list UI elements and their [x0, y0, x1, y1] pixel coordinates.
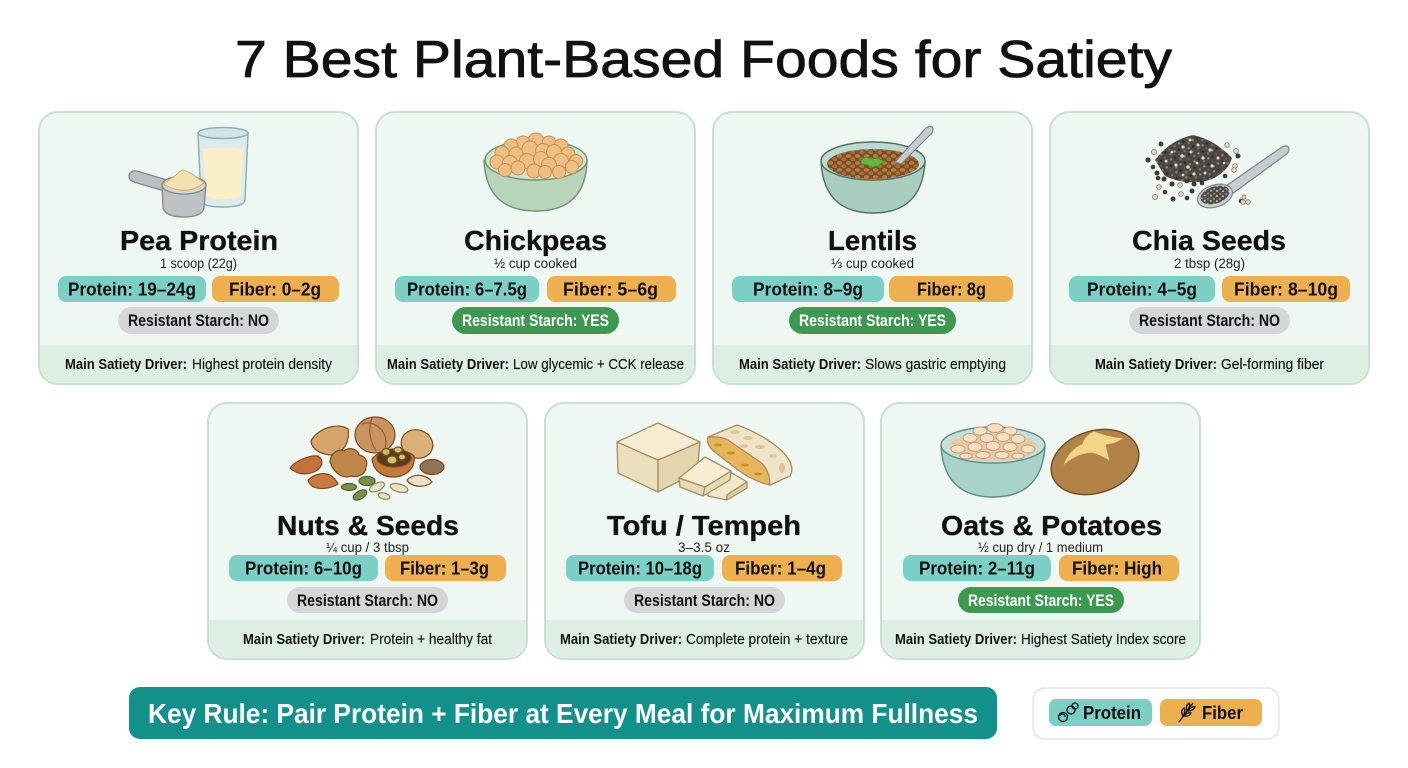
resistant starch pill: Resistant Starch: YES: [968, 592, 1114, 610]
protein pill: [229, 555, 378, 581]
protein pill: [395, 276, 539, 302]
card background: [881, 403, 1200, 659]
satiety driver: Low glycemic + CCK release: [513, 356, 684, 373]
driver band: [714, 345, 1031, 383]
resistant starch pill: Resistant Starch: NO: [634, 592, 775, 610]
resistant starch pill: [118, 307, 279, 334]
heading: Nuts & Seeds: [277, 510, 459, 541]
protein pill: [58, 276, 206, 302]
protein pill: Protein: 10–18g: [578, 558, 702, 578]
satiety driver: [1095, 356, 1324, 373]
legend: fiber: [1160, 699, 1262, 726]
heading: Tofu / Tempeh: [607, 510, 801, 541]
panel: lentils: [713, 112, 1032, 384]
fiber pill: [889, 276, 1013, 302]
satiety driver: [65, 356, 332, 373]
driver band: [377, 345, 694, 383]
heading: Oats & Potatoes: [941, 510, 1162, 541]
panel: nuts and seeds: [208, 403, 527, 659]
protein pill: [903, 555, 1051, 581]
legend: protein: [1049, 699, 1152, 726]
fiber pill: [385, 555, 506, 581]
protein pill: Protein: 2–11g: [919, 558, 1035, 578]
card background: [39, 112, 358, 384]
satiety driver: Main Satiety Driver:: [739, 356, 861, 373]
satiety driver: Highest Satiety Index score: [1021, 631, 1186, 648]
icon: oats bowl and baked potato: [941, 419, 1147, 505]
icon: scoop and glass of pea protein: [129, 128, 248, 217]
resistant starch pill: [789, 307, 956, 334]
satiety driver: Gel-forming fiber: [1221, 356, 1324, 373]
icon: wheat: [1179, 703, 1195, 722]
protein pill: Protein: 6–7.5g: [407, 280, 527, 300]
serving size: 3–3.5 oz: [678, 540, 730, 555]
icon: assorted nuts and seeds: [290, 417, 444, 502]
satiety driver: [895, 631, 1186, 648]
resistant starch pill: [958, 587, 1124, 613]
icon: tofu block and tempeh: [617, 423, 792, 500]
driver band: [546, 620, 863, 658]
fiber pill: Fiber: 8g: [917, 280, 986, 300]
driver band: [1051, 345, 1368, 383]
resistant starch pill: Resistant Starch: YES: [799, 312, 946, 330]
title: 7 Best Plant-Based Foods for Satiety: [235, 31, 1172, 89]
resistant starch pill: [624, 587, 785, 613]
icon: chia seed pile and spoon: [1145, 135, 1289, 212]
fiber pill: [212, 276, 339, 302]
fiber pill: Fiber: 1–3g: [400, 558, 489, 578]
heading: Chia Seeds: [1132, 225, 1286, 256]
protein pill: [732, 276, 884, 302]
fiber pill: Fiber: 8–10g: [1234, 280, 1338, 300]
legend: protein: Protein: [1083, 703, 1141, 723]
satiety driver: Main Satiety Driver:: [387, 356, 509, 373]
serving size: ⅓ cup cooked: [831, 256, 914, 271]
satiety driver: Highest protein density: [192, 356, 332, 373]
protein pill: Protein: 19–24g: [68, 280, 196, 300]
protein pill: [566, 555, 714, 581]
card background: [376, 112, 695, 384]
satiety driver: Slows gastric emptying: [865, 356, 1006, 373]
serving size: ¼ cup / 3 tbsp: [326, 540, 409, 555]
fiber pill: [1059, 555, 1179, 581]
driver band: [882, 620, 1199, 658]
legend: [1033, 688, 1279, 739]
satiety driver: Main Satiety Driver:: [65, 356, 187, 373]
driver band: [209, 620, 526, 658]
icon: bowl of lentils with spoon: [821, 126, 933, 213]
satiety driver: Protein + healthy fat: [370, 631, 493, 648]
protein pill: Protein: 6–10g: [245, 558, 362, 578]
resistant starch pill: [1129, 307, 1290, 334]
heading: Pea Protein: [120, 225, 278, 256]
serving size: 2 tbsp (28g): [1174, 256, 1245, 271]
icon: bowl of chickpeas: [484, 133, 587, 211]
protein pill: [1069, 276, 1215, 302]
resistant starch pill: Resistant Starch: NO: [128, 312, 269, 330]
fiber pill: [1222, 276, 1350, 302]
card background: [1050, 112, 1369, 384]
fiber pill: [547, 276, 676, 302]
satiety driver: Main Satiety Driver:: [560, 631, 682, 648]
fiber pill: [722, 555, 842, 581]
heading: Chickpeas: [464, 225, 607, 256]
legend: fiber: Fiber: [1202, 703, 1243, 723]
fiber pill: Fiber: 0–2g: [229, 280, 321, 300]
satiety driver: [243, 631, 493, 648]
panel: tofu and tempeh: [545, 403, 864, 659]
serving size: ½ cup dry / 1 medium: [978, 540, 1103, 555]
fiber pill: Fiber: High: [1072, 558, 1162, 578]
key rule banner: Key Rule: Pair Protein + Fiber at Every Meal for Maximum Fullness: [148, 698, 978, 729]
protein pill: Protein: 4–5g: [1087, 280, 1197, 300]
serving size: 1 scoop (22g): [160, 256, 237, 271]
driver band: [40, 345, 357, 383]
protein pill: Protein: 8–9g: [753, 280, 863, 300]
resistant starch pill: Resistant Starch: NO: [1139, 312, 1280, 330]
resistant starch pill: Resistant Starch: YES: [462, 312, 609, 330]
satiety driver: [387, 356, 684, 373]
fiber pill: Fiber: 1–4g: [735, 558, 826, 578]
icon: protein chain: [1058, 703, 1078, 722]
satiety driver: Main Satiety Driver:: [1095, 356, 1217, 373]
fiber pill: Fiber: 5–6g: [563, 280, 658, 300]
satiety driver: Complete protein + texture: [686, 631, 848, 648]
satiety driver: Main Satiety Driver:: [895, 631, 1017, 648]
card background: [713, 112, 1032, 384]
card background: [545, 403, 864, 659]
key rule banner: [129, 687, 997, 739]
panel: oats and potatoes: [881, 403, 1200, 659]
panel: chia seeds: [1050, 112, 1369, 384]
resistant starch pill: [452, 307, 619, 334]
serving size: ½ cup cooked: [494, 256, 577, 271]
panel: chickpeas: [376, 112, 695, 384]
resistant starch pill: [287, 587, 448, 613]
satiety driver: [560, 631, 848, 648]
satiety driver: Main Satiety Driver:: [243, 631, 365, 648]
resistant starch pill: Resistant Starch: NO: [297, 592, 438, 610]
panel: pea protein: [39, 112, 358, 384]
heading: Lentils: [828, 225, 917, 256]
satiety driver: [739, 356, 1006, 373]
card background: [208, 403, 527, 659]
